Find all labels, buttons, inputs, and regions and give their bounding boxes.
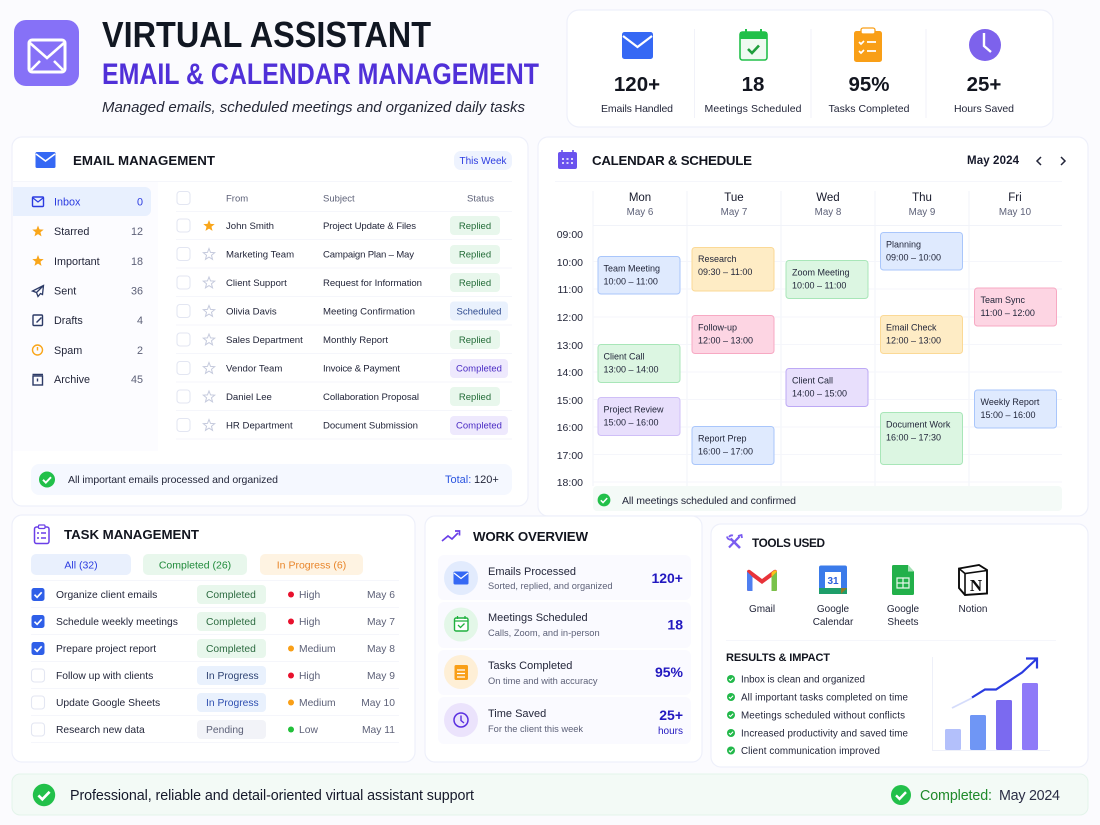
table header: From — [226, 194, 248, 204]
stat: emails handled — [601, 32, 673, 115]
event: Client Call Monday: Client Call — [604, 352, 645, 362]
task: Update Google Sheets: May 10 — [361, 698, 395, 709]
task: Follow up with clients: In Progress — [206, 671, 259, 682]
task: Organize client emails: High — [299, 590, 320, 601]
task: Prepare project report: Completed — [206, 644, 256, 655]
stat: meetings scheduled: Meetings Scheduled — [704, 103, 802, 115]
email row: Client Support: Replied — [459, 278, 491, 289]
email row: Vendor Team: Vendor Team — [226, 364, 282, 374]
overview row: emails processed — [438, 555, 691, 600]
task: Follow up with clients: May 9 — [367, 671, 395, 682]
event: Client Call Wednesday — [786, 368, 868, 406]
event: Zoom Meeting: Zoom Meeting — [792, 268, 850, 278]
event: Report Prep: Report Prep — [698, 434, 747, 444]
email row: Sales Department: Replied — [459, 335, 491, 346]
heading: results and impact: RESULTS & IMPACT — [726, 652, 830, 664]
title — [102, 14, 539, 91]
stat: emails handled: 120+ — [614, 73, 660, 96]
results list — [727, 674, 909, 757]
badge: this week: This Week — [459, 156, 508, 167]
folder: sent: 36 — [131, 286, 143, 298]
event: Research: Research — [698, 254, 737, 264]
task: Update Google Sheets: Medium — [299, 698, 336, 709]
folder: drafts: Drafts — [54, 315, 83, 327]
email row: Marketing Team: Replied — [459, 250, 491, 260]
icon: tools — [727, 535, 742, 548]
badge: this week — [454, 151, 512, 170]
heading: calendar and schedule: CALENDAR & SCHEDULE — [592, 153, 752, 168]
footer banner — [12, 774, 1088, 815]
folder: starred: Starred — [54, 226, 89, 238]
filter tabs: Completed (26) — [159, 560, 231, 572]
overview row: meetings scheduled: Meetings Scheduled — [488, 612, 588, 624]
event: Research — [692, 248, 774, 291]
task: Schedule weekly meetings — [32, 612, 395, 631]
sidebar background — [13, 182, 158, 451]
overview row: tasks completed: 95% — [655, 664, 684, 680]
tool: Notion: N — [970, 576, 983, 595]
folder: inbox: 0 — [137, 196, 143, 208]
task: Research new data: Pending — [206, 725, 244, 736]
event: Team Meeting: 10:00 – 11:00 — [604, 276, 658, 286]
task: Schedule weekly meetings: May 7 — [367, 617, 395, 628]
email row: Client Support: Request for Information — [323, 278, 422, 289]
email row: Sales Department: Monthly Report — [323, 335, 388, 346]
tool: Google Sheets: Google — [887, 604, 920, 615]
event: Project Review: Project Review — [604, 404, 664, 414]
overview row: emails processed: Sorted, replied, and organized — [488, 581, 613, 591]
email row: Marketing Team — [177, 245, 500, 264]
tool: Google Calendar: Google — [817, 604, 850, 615]
calendar day headers: May 7 — [721, 207, 747, 218]
panel: calendar and schedule — [538, 137, 1088, 516]
folder: starred: 12 — [131, 226, 143, 238]
task: Prepare project report: Prepare project report — [56, 644, 156, 655]
panel: key stats — [567, 10, 1053, 127]
results list: Client communication improved — [741, 746, 880, 757]
calendar confirmation bar: All meetings scheduled and confirmed — [622, 495, 796, 507]
task: Organize client emails: May 6 — [367, 590, 395, 601]
email summary bar: Total: — [445, 474, 471, 486]
email row: HR Department: HR Department — [226, 420, 293, 432]
email row: Olivia Davis — [177, 302, 508, 320]
calendar time axis: 15:00 — [557, 395, 583, 407]
task: Prepare project report: May 8 — [367, 644, 395, 655]
calendar confirmation bar — [593, 486, 1062, 511]
email row: Daniel Lee: Replied — [459, 392, 491, 403]
stat: hours saved: Hours Saved — [954, 103, 1014, 115]
title: EMAIL & CALENDAR MANAGEMENT — [102, 58, 539, 91]
calendar time axis: 12:00 — [557, 312, 583, 324]
email row: John Smith — [177, 216, 500, 235]
event: Planning: 09:00 – 10:00 — [886, 252, 941, 262]
heading: tools used: TOOLS USED — [752, 536, 825, 550]
stat: hours saved — [954, 29, 1014, 115]
tool: Gmail — [747, 570, 777, 615]
event: Document Work: Document Work — [886, 420, 951, 430]
event: Follow-up — [692, 316, 774, 354]
event: Email Check: 12:00 – 13:00 — [886, 336, 941, 346]
calendar time axis: 18:00 — [557, 477, 583, 489]
overview row: time saved: 25+ — [659, 707, 683, 723]
email row: Vendor Team — [177, 359, 508, 378]
overview row: meetings scheduled — [438, 602, 691, 648]
icon: calendar header — [558, 150, 577, 169]
heading: email management: EMAIL MANAGEMENT — [73, 153, 215, 168]
event: Document Work: 16:00 – 17:30 — [886, 432, 941, 442]
email row: Marketing Team: Campaign Plan – May — [323, 250, 414, 260]
table header — [177, 192, 494, 204]
email row: John Smith: Replied — [459, 221, 491, 232]
event: Team Meeting — [598, 256, 680, 294]
overview row: time saved — [438, 697, 691, 744]
event: Team Sync: 11:00 – 12:00 — [980, 308, 1035, 318]
email summary bar — [31, 464, 512, 495]
calendar time axis: 13:00 — [557, 340, 583, 352]
tool: Google Calendar — [813, 566, 854, 628]
results list: All important tasks completed on time — [741, 692, 909, 704]
calendar grid lines — [593, 191, 1062, 486]
panel: task management — [12, 515, 415, 762]
folder: important: Important — [54, 256, 100, 268]
task: Schedule weekly meetings: High — [299, 617, 320, 628]
event: Follow-up: Follow-up — [698, 322, 737, 332]
email row: Olivia Davis: Olivia Davis — [226, 306, 277, 318]
results list: Increased productivity and saved time — [741, 728, 909, 740]
folder: drafts: 4 — [137, 315, 143, 327]
tool: Google Sheets: Sheets — [887, 617, 919, 628]
event: Planning: Planning — [886, 240, 921, 250]
email row: HR Department: Document Submission — [323, 420, 418, 432]
calendar day headers: Fri — [1008, 192, 1022, 204]
calendar day headers: Thu — [912, 192, 932, 204]
event: Zoom Meeting — [786, 260, 868, 298]
folder: sent: Sent — [54, 286, 76, 298]
event: Team Meeting: Team Meeting — [604, 264, 660, 274]
event: Document Work — [880, 412, 962, 464]
task: Follow up with clients: High — [299, 671, 320, 682]
calendar time axis: 11:00 — [558, 284, 583, 296]
icon: clipboard — [34, 525, 49, 544]
email row: Marketing Team: Marketing Team — [226, 250, 294, 260]
folder: important: 18 — [131, 256, 143, 268]
calendar time axis — [557, 229, 583, 489]
event: Project Review — [598, 398, 680, 436]
email summary bar: 120+ — [474, 474, 499, 486]
event: Team Sync: Team Sync — [980, 295, 1026, 305]
results list: Meetings scheduled without conflicts — [741, 710, 905, 722]
email row: Sales Department — [177, 330, 500, 349]
task: Follow up with clients — [32, 666, 395, 685]
stat: hours saved: 25+ — [967, 73, 1001, 96]
task: Prepare project report — [32, 639, 395, 658]
table header: Subject — [323, 194, 355, 204]
overview row: emails processed: Emails Processed — [488, 566, 576, 578]
folder: drafts — [33, 315, 143, 327]
event: Email Check: Email Check — [886, 322, 937, 332]
folder: spam: 2 — [137, 345, 143, 357]
task: Research new data: Low — [299, 725, 318, 736]
calendar day headers: May 10 — [999, 207, 1032, 218]
overview row: tasks completed — [438, 650, 691, 695]
calendar day headers: Mon — [629, 192, 651, 204]
task: Research new data: Research new data — [56, 725, 145, 736]
heading: task management: TASK MANAGEMENT — [64, 527, 199, 542]
calendar day headers: May 8 — [815, 207, 842, 218]
calendar day headers: May 9 — [909, 207, 935, 218]
overview row: tasks completed: On time and with accuracy — [488, 676, 598, 686]
event: Client Call Wednesday: 14:00 – 15:00 — [792, 388, 847, 398]
bar chart: growth — [932, 657, 1050, 750]
email row: Client Support — [177, 273, 500, 292]
folder: spam: Spam — [54, 345, 82, 357]
task: Update Google Sheets: In Progress — [206, 698, 259, 709]
overview row: time saved: hours — [658, 726, 683, 737]
tool: Google Sheets — [887, 565, 920, 628]
task: Research new data: May 11 — [362, 725, 395, 736]
stat: meetings scheduled — [704, 29, 802, 115]
task: Update Google Sheets — [32, 693, 395, 712]
calendar day headers — [627, 192, 1032, 218]
email row: Olivia Davis: Scheduled — [457, 306, 501, 318]
panel: email management — [12, 137, 528, 506]
folder: starred — [32, 226, 143, 238]
overview row: time saved: Time Saved — [488, 708, 546, 720]
event: Email Check — [880, 316, 962, 354]
subtitle: Managed emails, scheduled meetings and organized daily tasks — [102, 99, 526, 116]
stat: tasks completed — [828, 28, 910, 115]
task: Schedule weekly meetings: Completed — [206, 617, 256, 628]
stat: tasks completed: 95% — [848, 73, 890, 96]
email table — [176, 192, 512, 439]
title: VIRTUAL ASSISTANT — [102, 14, 431, 55]
panel: work overview — [425, 516, 702, 762]
icon: email header — [36, 152, 56, 168]
task: Research new data — [32, 720, 395, 739]
task: Organize client emails — [32, 585, 395, 604]
filter tabs — [31, 554, 363, 575]
event: Weekly Report: Weekly Report — [980, 397, 1040, 407]
calendar day headers: Tue — [724, 192, 744, 204]
calendar time axis: 14:00 — [557, 367, 583, 379]
event: Research: 09:30 – 11:00 — [698, 267, 752, 277]
email row: Vendor Team: Completed — [456, 364, 502, 374]
overview row: meetings scheduled: Calls, Zoom, and in-person — [488, 628, 600, 638]
email row: Daniel Lee — [177, 387, 500, 406]
calendar day headers: May 6 — [627, 207, 654, 218]
stat: emails handled: Emails Handled — [601, 103, 673, 115]
event: Client Call Monday — [598, 344, 680, 382]
overview row: tasks completed: Tasks Completed — [488, 660, 572, 672]
email row: Daniel Lee: Collaboration Proposal — [323, 392, 419, 403]
email row: Client Support: Client Support — [226, 278, 287, 289]
month selector: May 2024 — [967, 155, 1020, 167]
folder: archive: Archive — [54, 374, 90, 386]
email row: John Smith: John Smith — [226, 221, 274, 232]
calendar day headers: Wed — [816, 192, 840, 204]
folder: archive: 45 — [131, 374, 143, 386]
folder: archive — [32, 374, 143, 386]
calendar time axis: 10:00 — [557, 257, 583, 269]
table header: Status — [467, 194, 494, 204]
overview row: emails processed: 120+ — [651, 570, 683, 586]
tool: Google Calendar: Calendar — [813, 617, 854, 628]
task: Organize client emails: Completed — [206, 590, 256, 601]
event: Planning — [880, 232, 962, 270]
email row: Sales Department: Sales Department — [226, 335, 303, 346]
calendar time axis: 16:00 — [557, 422, 583, 434]
footer banner: Professional, reliable and detail-oriented virtual assistant support — [70, 788, 474, 804]
event: Report Prep: 16:00 – 17:00 — [698, 446, 753, 456]
event: Client Call Wednesday: Client Call — [792, 376, 833, 386]
month selector — [967, 155, 1065, 167]
stat: tasks completed: Tasks Completed — [828, 103, 910, 115]
header: logo icon — [14, 20, 79, 86]
overview row: meetings scheduled: 18 — [667, 616, 683, 632]
event: Zoom Meeting: 10:00 – 11:00 — [792, 280, 846, 290]
stat: meetings scheduled: 18 — [742, 73, 764, 96]
footer banner: Completed: — [920, 788, 992, 804]
email row: Daniel Lee: Daniel Lee — [226, 392, 272, 403]
email row: Olivia Davis: Meeting Confirmation — [323, 306, 415, 318]
task: Update Google Sheets: Update Google Sheets — [56, 698, 160, 709]
event: Client Call Monday: 13:00 – 14:00 — [604, 364, 659, 374]
tool: Notion — [959, 565, 987, 615]
folder: sent — [32, 286, 143, 298]
event: Report Prep — [692, 426, 774, 464]
calendar time axis: 09:00 — [557, 229, 583, 241]
heading: work overview: WORK OVERVIEW — [473, 529, 588, 544]
event: Project Review: 15:00 – 16:00 — [604, 418, 659, 428]
folder: spam — [32, 345, 143, 357]
icon: trend arrow — [442, 531, 460, 541]
overview row: time saved: For the client this week — [488, 724, 583, 734]
results list: Inbox is clean and organized — [741, 674, 865, 686]
event: Weekly Report — [974, 390, 1056, 428]
task: Follow up with clients: Follow up with clients — [56, 671, 153, 682]
footer banner: May 2024 — [999, 788, 1060, 804]
email row: HR Department: Completed — [456, 420, 502, 432]
filter tabs: All (32) — [64, 560, 98, 572]
email summary bar: All important emails processed and organized — [68, 474, 278, 486]
event: Weekly Report: 15:00 – 16:00 — [980, 410, 1036, 420]
calendar time axis: 17:00 — [557, 450, 583, 462]
tool: Notion: Notion — [959, 604, 987, 615]
event: Follow-up: 12:00 – 13:00 — [698, 336, 753, 346]
task: Organize client emails: Organize client emails — [56, 590, 157, 601]
folder: inbox — [32, 196, 143, 208]
filter tabs: In Progress (6) — [277, 560, 346, 572]
tool: Gmail: Gmail — [749, 604, 775, 615]
task: Schedule weekly meetings: Schedule weekly meetings — [56, 617, 178, 628]
event: Team Sync — [974, 288, 1056, 326]
email row: John Smith: Project Update & Files — [323, 221, 416, 232]
panel: tools used and results — [711, 524, 1088, 767]
folder: inbox: Inbox — [54, 196, 81, 208]
folder: important — [32, 255, 143, 268]
sidebar: folders — [13, 187, 151, 386]
tool: Google Calendar: 31 — [827, 576, 839, 587]
task: Prepare project report: Medium — [299, 644, 336, 655]
email row: Vendor Team: Invoice & Payment — [323, 364, 400, 374]
email row: HR Department — [177, 416, 508, 435]
